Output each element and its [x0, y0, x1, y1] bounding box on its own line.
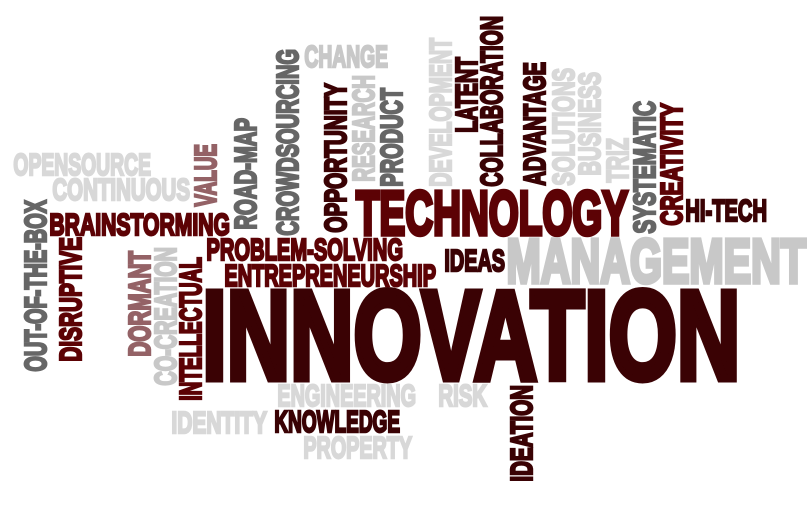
word: DORMANT: DORMANT: [122, 251, 157, 357]
word: CHANGE: CHANGE: [304, 39, 388, 74]
word: SYSTEMATIC: SYSTEMATIC: [627, 101, 662, 234]
word: RISK: RISK: [438, 378, 487, 413]
word: OPPORTUNITY: OPPORTUNITY: [318, 83, 353, 233]
word: TRIZ: TRIZ: [600, 138, 635, 183]
word: CO-CREATION: CO-CREATION: [148, 247, 183, 386]
word: SOLUTIONS: SOLUTIONS: [546, 68, 581, 186]
word: ROAD-MAP: ROAD-MAP: [228, 118, 263, 230]
word: BRAINSTORMING: BRAINSTORMING: [49, 207, 230, 242]
word: PRODUCT: PRODUCT: [374, 88, 409, 187]
word: VALUE: VALUE: [188, 144, 223, 207]
word: PROPERTY: PROPERTY: [303, 430, 412, 465]
word: ENGINEERING: ENGINEERING: [277, 378, 416, 413]
word: PROBLEM-SOLVING: PROBLEM-SOLVING: [206, 232, 403, 267]
word: BUSINESS: BUSINESS: [572, 72, 607, 176]
word: IDENTITY: IDENTITY: [171, 405, 267, 440]
word: DISRUPTIVE: DISRUPTIVE: [53, 237, 88, 362]
word: LATENT: LATENT: [449, 57, 484, 133]
word: CREATIVITY: CREATIVITY: [654, 103, 689, 226]
word: IDEAS: IDEAS: [444, 243, 505, 278]
word: OUT-OF-THE-BOX: OUT-OF-THE-BOX: [18, 200, 53, 372]
word: OPENSOURCE: OPENSOURCE: [13, 147, 151, 182]
word: IDEATION: IDEATION: [504, 385, 539, 482]
word: INTELLECTUAL: INTELLECTUAL: [173, 257, 208, 401]
word: TECHNOLOGY: TECHNOLOGY: [356, 180, 628, 249]
word: RESEARCH: RESEARCH: [346, 75, 381, 182]
word: KNOWLEDGE: KNOWLEDGE: [274, 404, 400, 439]
word: ENTREPRENEURSHIP: ENTREPRENEURSHIP: [224, 258, 436, 293]
word: CONTINUOUS: CONTINUOUS: [52, 172, 190, 207]
